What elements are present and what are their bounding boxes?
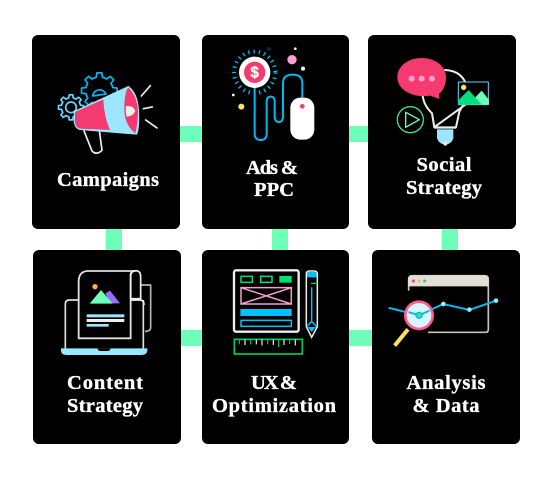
- heading: ads and ppc: Ads &: [246, 157, 298, 179]
- panel: analysis and data: & Data: [412, 395, 480, 417]
- icon: dollar coin and mouse: [232, 47, 314, 140]
- icon: laptop base: [61, 348, 147, 355]
- icon: wireframe: [234, 270, 299, 332]
- icon: light bulb with media: [397, 58, 489, 146]
- panel: campaigns: [32, 35, 180, 229]
- icon: megaphone with gears: [58, 73, 157, 153]
- panel: ads and ppc: PPC: [254, 179, 294, 201]
- icon: document picture: [92, 284, 98, 289]
- icon: document: [79, 271, 135, 338]
- panel: ads and ppc: [202, 35, 349, 229]
- icon: document text lines: [87, 314, 124, 317]
- heading: ux and optimization: UX &: [251, 372, 297, 394]
- panel: analysis and data: [372, 250, 520, 444]
- icon: magnifier: [405, 302, 433, 329]
- icon: megaphone handle: [84, 130, 102, 153]
- panel: content strategy: [33, 250, 181, 444]
- heading: social strategy: Social: [416, 154, 472, 176]
- icon: large gear: [82, 73, 117, 108]
- panel: ux and optimization: Optimization: [212, 395, 337, 417]
- panel: social strategy: Strategy: [406, 177, 483, 199]
- icon: ruler: [234, 339, 302, 354]
- heading: campaigns: Campaigns: [57, 169, 159, 191]
- icon: play button: [397, 107, 423, 133]
- icon: picture frame: [458, 82, 488, 105]
- icon: wireframe, pencil and ruler: [234, 270, 318, 354]
- connectors: [106, 126, 458, 346]
- icon: laptop outline: [65, 300, 143, 349]
- icon: magnifier handle: [395, 329, 408, 346]
- icon: dollar coin and mouse: $: [250, 65, 259, 82]
- icon: laptop with document: [61, 271, 151, 355]
- icon: pencil: [306, 271, 317, 337]
- icon: line chart: [389, 301, 496, 312]
- panel: social strategy: [368, 35, 516, 229]
- icon: speech bubble: [397, 58, 446, 99]
- icon: browser chart with magnifier: [389, 275, 498, 346]
- panel: ux and optimization: [202, 250, 349, 444]
- icon: mouse: [290, 98, 314, 140]
- icon: cable: [255, 75, 302, 140]
- icon: coin rays: [234, 52, 275, 93]
- icon: megaphone body: [74, 87, 139, 134]
- icon: bulb outline: [423, 70, 467, 127]
- panel: content strategy: Strategy: [67, 395, 144, 417]
- icon: sound lines: [141, 86, 157, 128]
- heading: analysis and data: Analysis: [406, 372, 486, 394]
- icon: browser window: [409, 276, 488, 332]
- icon: coin: [239, 57, 270, 88]
- heading: content strategy: Content: [67, 372, 143, 394]
- icon: bulb base: [437, 129, 453, 145]
- icon: small gear: [58, 95, 84, 120]
- icon: dots: [267, 47, 271, 51]
